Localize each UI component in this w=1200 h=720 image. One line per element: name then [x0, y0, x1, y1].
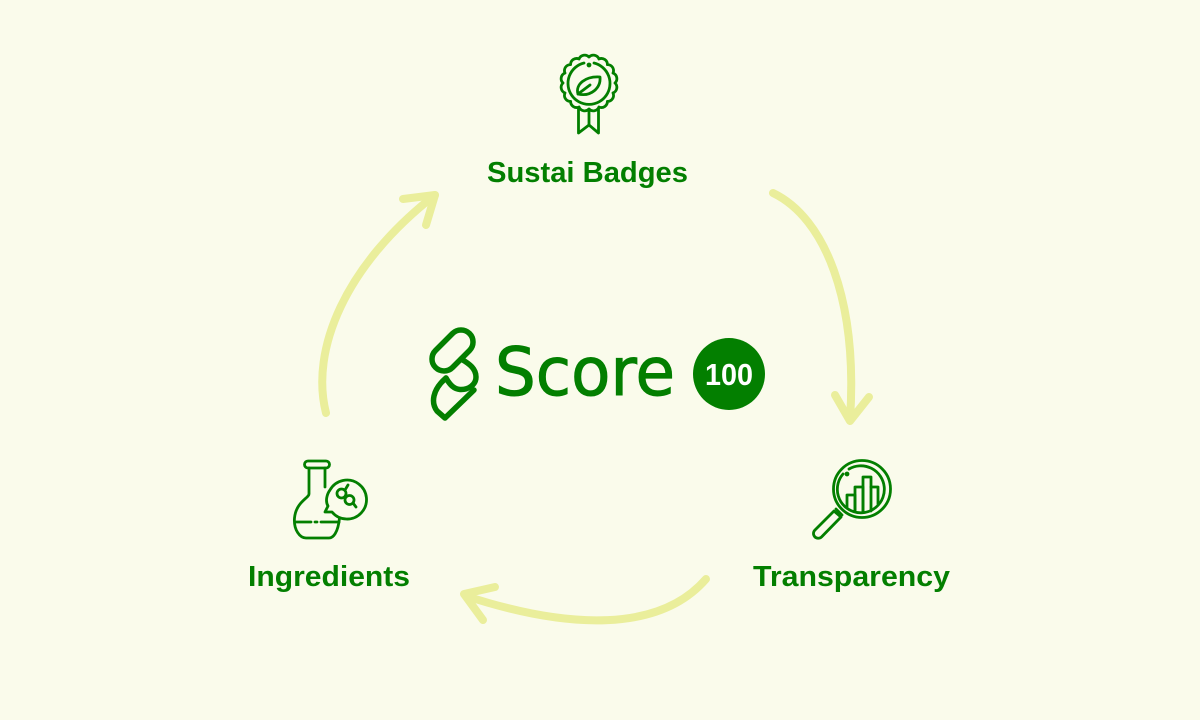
score number: 100: [705, 357, 753, 392]
arrow: ingredients to badges: [322, 195, 435, 413]
arrow: badges to transparency: [773, 193, 869, 421]
icon: sustainability badge: [561, 55, 617, 133]
wordmark: Score: [495, 333, 675, 411]
icon: magnifier with bar chart: [813, 460, 890, 538]
score circle: [693, 338, 765, 410]
label: Transparency: Transparency: [753, 561, 950, 593]
label: Ingredients: Ingredients: [248, 561, 410, 593]
arrow: transparency to ingredients: [464, 579, 706, 620]
icon: flask with molecule: [294, 461, 367, 538]
logo: Score 100: [432, 330, 765, 418]
label: Sustai Badges: Sustai Badges: [487, 157, 688, 189]
logo mark: [432, 330, 476, 418]
